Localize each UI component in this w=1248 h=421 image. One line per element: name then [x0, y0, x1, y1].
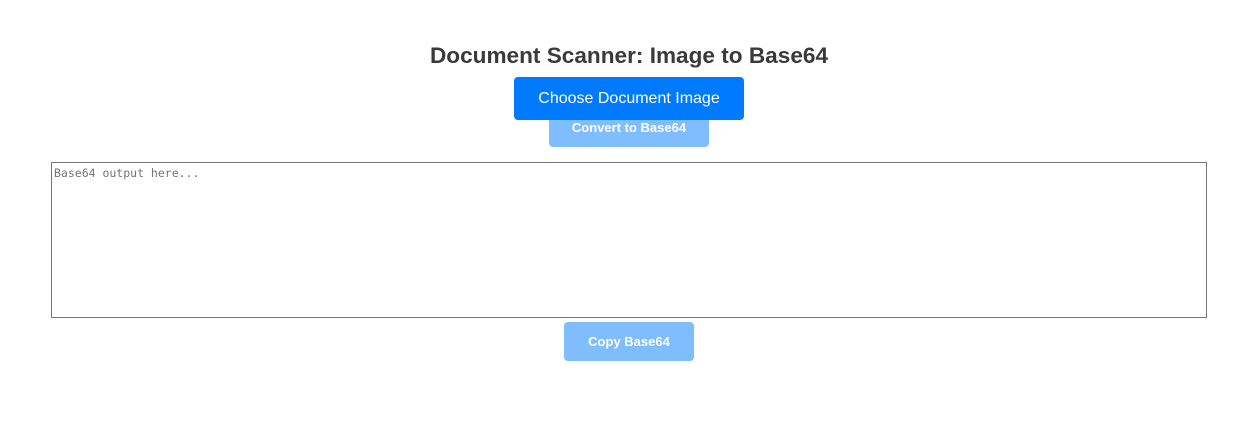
- choose document button: Choose Document Image: [538, 90, 720, 107]
- convert button: Convert to Base64: [572, 120, 686, 135]
- textarea output: [51, 162, 1207, 318]
- textarea output: Base64 output here...: [54, 166, 199, 180]
- copy button: [564, 322, 694, 361]
- convert button: [549, 108, 709, 147]
- choose document button: [514, 77, 744, 120]
- title: Document Scanner: Image to Base64: [430, 43, 828, 68]
- copy button: Copy Base64: [588, 334, 670, 349]
